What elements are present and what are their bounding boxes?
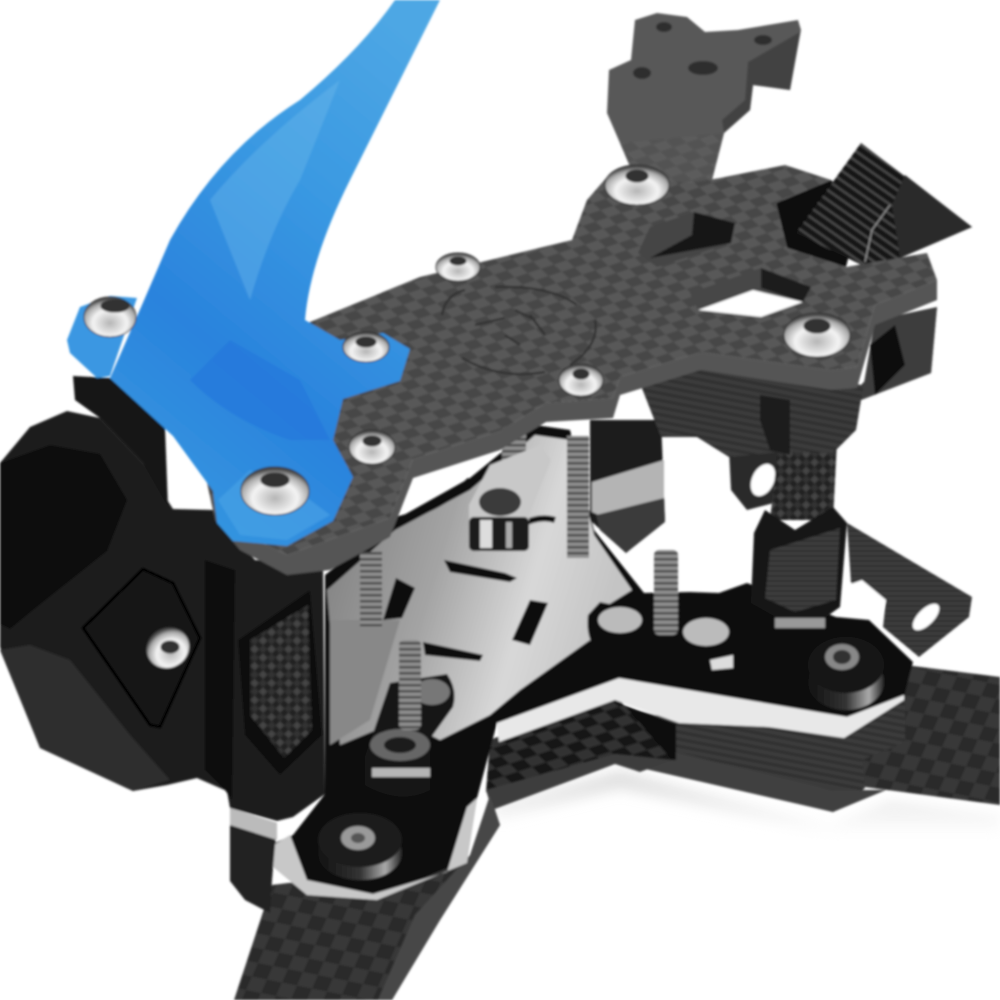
right carbon arm (845, 665, 1000, 805)
right mesh standoff (751, 440, 847, 628)
lower layered stack (600, 700, 905, 812)
carbon wedge between arms (486, 690, 672, 810)
top carbon plate side (215, 280, 937, 575)
ground shadow (490, 770, 1000, 835)
silver plate edge (497, 678, 904, 742)
front carbon arm (234, 795, 500, 1000)
rear left post (73, 376, 168, 507)
screw heads (84, 165, 850, 676)
rear carbon arm (607, 13, 801, 190)
front mesh tube (238, 590, 322, 775)
front washer and bolt (318, 813, 402, 880)
right washer and bolt (808, 637, 884, 710)
black print under top plate right (638, 307, 937, 457)
hexagonal hole (690, 268, 811, 317)
blue printed antenna mount (67, 0, 440, 546)
lower left spacer and foot (230, 808, 277, 913)
top carbon plate (200, 165, 937, 555)
threaded screws (360, 425, 589, 628)
slot hole (638, 212, 735, 267)
wavy trace on plate (395, 480, 555, 525)
engraved logo (442, 287, 596, 374)
lower left oval nut (365, 640, 455, 796)
right 3D-printed strap (847, 523, 972, 657)
center nut block (469, 445, 551, 552)
left 3D-printed mount (0, 411, 325, 821)
bottom glossy plate (272, 425, 913, 900)
camera mount cylinder (776, 143, 972, 270)
slots (444, 560, 517, 582)
rear spacer stack (590, 420, 665, 553)
rear strap behind plate (729, 450, 785, 510)
right oval nut (588, 550, 734, 672)
